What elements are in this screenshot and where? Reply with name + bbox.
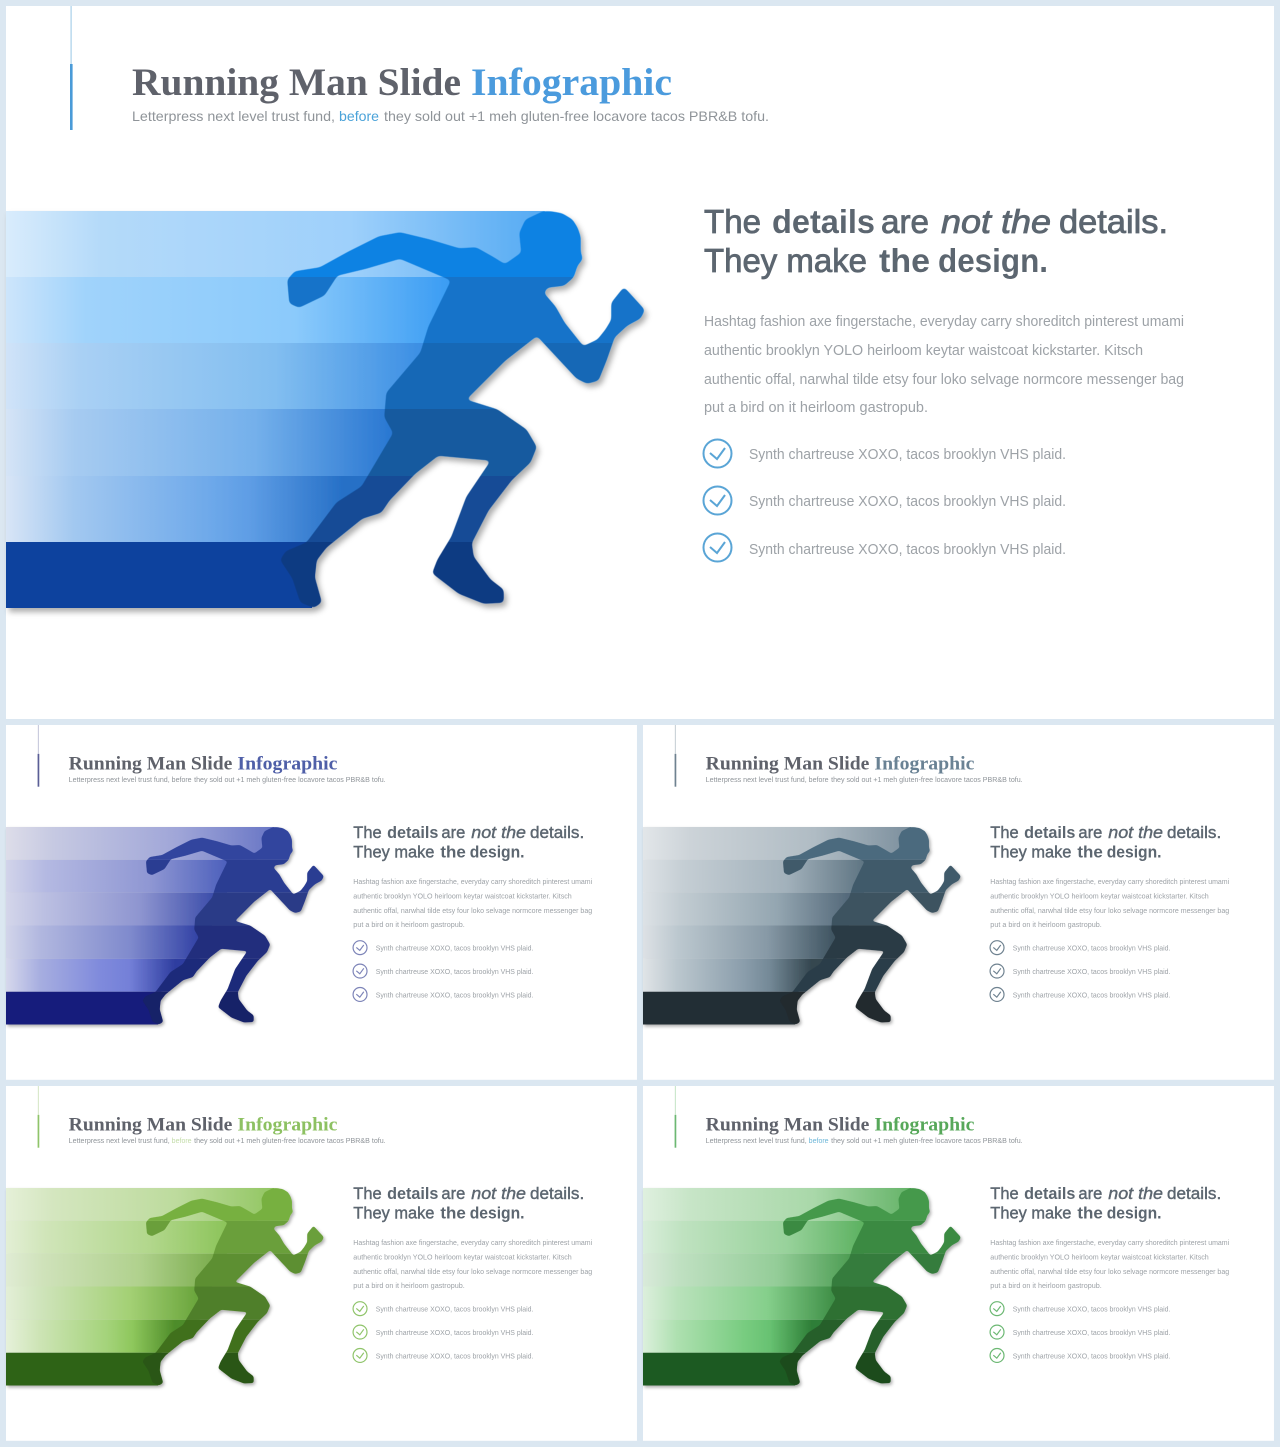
check item 3: Synth chartreuse XOXO, tacos brooklyn VHS plaid. — [1013, 1352, 1170, 1361]
title: Infographic — [874, 1114, 975, 1135]
running man graphic with speed bands — [643, 1185, 968, 1388]
heading — [990, 1185, 1221, 1222]
check item 2: Synth chartreuse XOXO, tacos brooklyn VHS plaid. — [1013, 967, 1170, 976]
subtitle — [706, 1138, 1023, 1145]
subtitle: they sold out +1 meh gluten-free locavore tacos PBR&B tofu. — [831, 777, 1023, 784]
title: Infographic — [237, 1114, 338, 1135]
heading: the — [1077, 843, 1103, 861]
check item 3 — [990, 987, 1170, 1001]
body text: Hashtag fashion axe fingerstache, everyday carry shoreditch pinterest umami — [704, 314, 1184, 330]
body text — [990, 1238, 1230, 1290]
check item 3 — [353, 987, 533, 1001]
slide 2: indigo — [6, 725, 637, 1080]
heading: details. — [530, 824, 584, 842]
check item 2: Synth chartreuse XOXO, tacos brooklyn VHS plaid. — [749, 494, 1066, 510]
title — [69, 1114, 338, 1135]
check item 3 — [704, 534, 1066, 562]
slide 3: slate — [643, 725, 1274, 1080]
heading: the — [440, 843, 466, 861]
heading — [704, 203, 1168, 279]
check item 1: Synth chartreuse XOXO, tacos brooklyn VHS plaid. — [1013, 943, 1170, 952]
heading: The — [990, 824, 1019, 842]
check item 1 — [704, 440, 1066, 468]
body text: authentic brooklyn YOLO heirloom keytar waistcoat kickstarter. Kitsch — [353, 1253, 572, 1262]
check item 2: Synth chartreuse XOXO, tacos brooklyn VHS plaid. — [376, 1328, 533, 1337]
check item 1 — [990, 941, 1170, 955]
body text: authentic brooklyn YOLO heirloom keytar waistcoat kickstarter. Kitsch — [704, 343, 1143, 359]
body text: authentic brooklyn YOLO heirloom keytar waistcoat kickstarter. Kitsch — [990, 1253, 1209, 1262]
heading: design. — [1107, 1204, 1161, 1222]
body text: authentic offal, narwhal tilde etsy four loko selvage normcore messenger bag — [353, 1267, 592, 1276]
heading: They make — [990, 843, 1071, 861]
accent bar — [675, 754, 676, 787]
heading: design. — [470, 843, 524, 861]
body text: authentic offal, narwhal tilde etsy four loko selvage normcore messenger bag — [704, 372, 1184, 388]
runner silhouette — [137, 824, 331, 1027]
title: Running Man Slide — [69, 753, 233, 774]
body text: authentic brooklyn YOLO heirloom keytar waistcoat kickstarter. Kitsch — [353, 892, 572, 901]
check item 2 — [704, 486, 1066, 514]
heading: design. — [938, 242, 1048, 279]
check item 1: Synth chartreuse XOXO, tacos brooklyn VHS plaid. — [376, 1304, 533, 1313]
heading: the — [440, 1204, 466, 1222]
running man graphic with speed bands — [643, 824, 968, 1027]
heading: They make — [353, 1204, 434, 1222]
accent bar — [70, 64, 73, 130]
heading: design. — [1107, 843, 1161, 861]
subtitle: Letterpress next level trust fund, — [706, 1138, 807, 1145]
accent bar — [38, 1115, 39, 1148]
title: Infographic — [471, 61, 672, 104]
check item 2 — [353, 964, 533, 978]
running man graphic with speed bands — [6, 1185, 331, 1388]
title: Running Man Slide — [706, 1114, 870, 1135]
body text: Hashtag fashion axe fingerstache, everyday carry shoreditch pinterest umami — [990, 1238, 1230, 1247]
heading: are — [1078, 1185, 1102, 1203]
heading: The — [990, 1185, 1019, 1203]
body text: put a bird on it heirloom gastropub. — [990, 1281, 1102, 1290]
title: Infographic — [237, 753, 338, 774]
subtitle — [706, 777, 1023, 784]
body text: put a bird on it heirloom gastropub. — [990, 920, 1102, 929]
title — [706, 1114, 975, 1135]
check item 3 — [990, 1348, 1170, 1362]
accent bar — [38, 754, 39, 787]
check item 2 — [990, 964, 1170, 978]
heading: the — [1077, 1204, 1103, 1222]
check item 3: Synth chartreuse XOXO, tacos brooklyn VHS plaid. — [376, 991, 533, 1000]
heading: are — [1078, 824, 1102, 842]
title — [706, 753, 975, 774]
body text: put a bird on it heirloom gastropub. — [353, 920, 465, 929]
body text — [990, 877, 1230, 929]
heading: are — [881, 203, 929, 240]
title: Running Man Slide — [69, 1114, 233, 1135]
body text: authentic offal, narwhal tilde etsy four loko selvage normcore messenger bag — [990, 1267, 1229, 1276]
check item 1: Synth chartreuse XOXO, tacos brooklyn VHS plaid. — [1013, 1304, 1170, 1313]
body text — [353, 877, 593, 929]
heading — [990, 824, 1221, 861]
body text: authentic offal, narwhal tilde etsy four loko selvage normcore messenger bag — [990, 906, 1229, 915]
check item 1: Synth chartreuse XOXO, tacos brooklyn VHS plaid. — [749, 447, 1066, 463]
heading: The — [353, 1185, 382, 1203]
running man graphic with speed bands — [6, 824, 331, 1027]
heading: details. — [1167, 1185, 1221, 1203]
subtitle: before — [172, 777, 192, 784]
heading: not the — [1108, 1185, 1163, 1203]
heading: details. — [530, 1185, 584, 1203]
check item 1 — [353, 941, 533, 955]
subtitle: before — [809, 777, 829, 784]
checklist — [704, 440, 1066, 562]
heading: not the — [471, 1185, 526, 1203]
heading: are — [441, 824, 465, 842]
subtitle: they sold out +1 meh gluten-free locavore tacos PBR&B tofu. — [831, 1138, 1023, 1145]
body text — [353, 1238, 593, 1290]
body text: authentic brooklyn YOLO heirloom keytar waistcoat kickstarter. Kitsch — [990, 892, 1209, 901]
subtitle — [132, 108, 769, 124]
subtitle: before — [172, 1138, 192, 1145]
heading: They make — [353, 843, 434, 861]
runner silhouette — [270, 205, 660, 612]
heading: details — [387, 824, 438, 842]
body text: Hashtag fashion axe fingerstache, everyday carry shoreditch pinterest umami — [990, 877, 1230, 886]
heading: not the — [941, 203, 1051, 240]
heading: They make — [990, 1204, 1071, 1222]
body text: put a bird on it heirloom gastropub. — [353, 1281, 465, 1290]
heading: details. — [1167, 824, 1221, 842]
check item 3: Synth chartreuse XOXO, tacos brooklyn VHS plaid. — [376, 1352, 533, 1361]
subtitle: before — [809, 1138, 829, 1145]
subtitle — [69, 777, 386, 784]
check item 1: Synth chartreuse XOXO, tacos brooklyn VHS plaid. — [376, 943, 533, 952]
title — [132, 61, 672, 104]
check item 1 — [990, 1302, 1170, 1316]
heading: details — [387, 1185, 438, 1203]
heading: not the — [471, 824, 526, 842]
heading: The — [353, 824, 382, 842]
heading: are — [441, 1185, 465, 1203]
check item 2: Synth chartreuse XOXO, tacos brooklyn VHS plaid. — [376, 967, 533, 976]
title: Infographic — [874, 753, 975, 774]
heading — [353, 824, 584, 861]
check item 2: Synth chartreuse XOXO, tacos brooklyn VHS plaid. — [1013, 1328, 1170, 1337]
slide 1: large blue — [6, 6, 1274, 719]
slide 4: lime — [6, 1086, 637, 1441]
title: Running Man Slide — [132, 61, 461, 104]
check item 3: Synth chartreuse XOXO, tacos brooklyn VHS plaid. — [1013, 991, 1170, 1000]
body text — [704, 314, 1184, 416]
title — [69, 753, 338, 774]
subtitle — [69, 1138, 386, 1145]
accent bar — [675, 1115, 676, 1148]
subtitle: before — [339, 108, 379, 124]
runner silhouette — [774, 824, 968, 1027]
runner silhouette — [137, 1185, 331, 1388]
check item 3 — [353, 1348, 533, 1362]
heading: details — [1024, 824, 1075, 842]
heading: the — [879, 242, 930, 279]
body text: put a bird on it heirloom gastropub. — [704, 400, 928, 416]
subtitle: Letterpress next level trust fund, — [69, 1138, 170, 1145]
slide 5: green — [643, 1086, 1274, 1441]
heading: The — [704, 203, 761, 240]
body text: Hashtag fashion axe fingerstache, everyday carry shoreditch pinterest umami — [353, 1238, 593, 1247]
subtitle: Letterpress next level trust fund, — [706, 777, 807, 784]
checklist — [353, 1302, 533, 1362]
checklist — [353, 941, 533, 1001]
heading: details — [1024, 1185, 1075, 1203]
body text: Hashtag fashion axe fingerstache, everyday carry shoreditch pinterest umami — [353, 877, 593, 886]
heading — [353, 1185, 584, 1222]
subtitle: they sold out +1 meh gluten-free locavore tacos PBR&B tofu. — [194, 1138, 386, 1145]
subtitle: Letterpress next level trust fund, — [132, 108, 335, 124]
check item 3: Synth chartreuse XOXO, tacos brooklyn VHS plaid. — [749, 542, 1066, 558]
subtitle: they sold out +1 meh gluten-free locavore tacos PBR&B tofu. — [384, 108, 769, 124]
heading: details — [772, 203, 875, 240]
runner silhouette — [774, 1185, 968, 1388]
checklist — [990, 941, 1170, 1001]
heading: details. — [1059, 203, 1168, 240]
subtitle: they sold out +1 meh gluten-free locavore tacos PBR&B tofu. — [194, 777, 386, 784]
subtitle: Letterpress next level trust fund, — [69, 777, 170, 784]
heading: They make — [704, 242, 867, 279]
running man graphic with speed bands — [6, 205, 660, 612]
heading: design. — [470, 1204, 524, 1222]
check item 1 — [353, 1302, 533, 1316]
check item 2 — [353, 1325, 533, 1339]
check item 2 — [990, 1325, 1170, 1339]
title: Running Man Slide — [706, 753, 870, 774]
body text: authentic offal, narwhal tilde etsy four loko selvage normcore messenger bag — [353, 906, 592, 915]
checklist — [990, 1302, 1170, 1362]
heading: not the — [1108, 824, 1163, 842]
